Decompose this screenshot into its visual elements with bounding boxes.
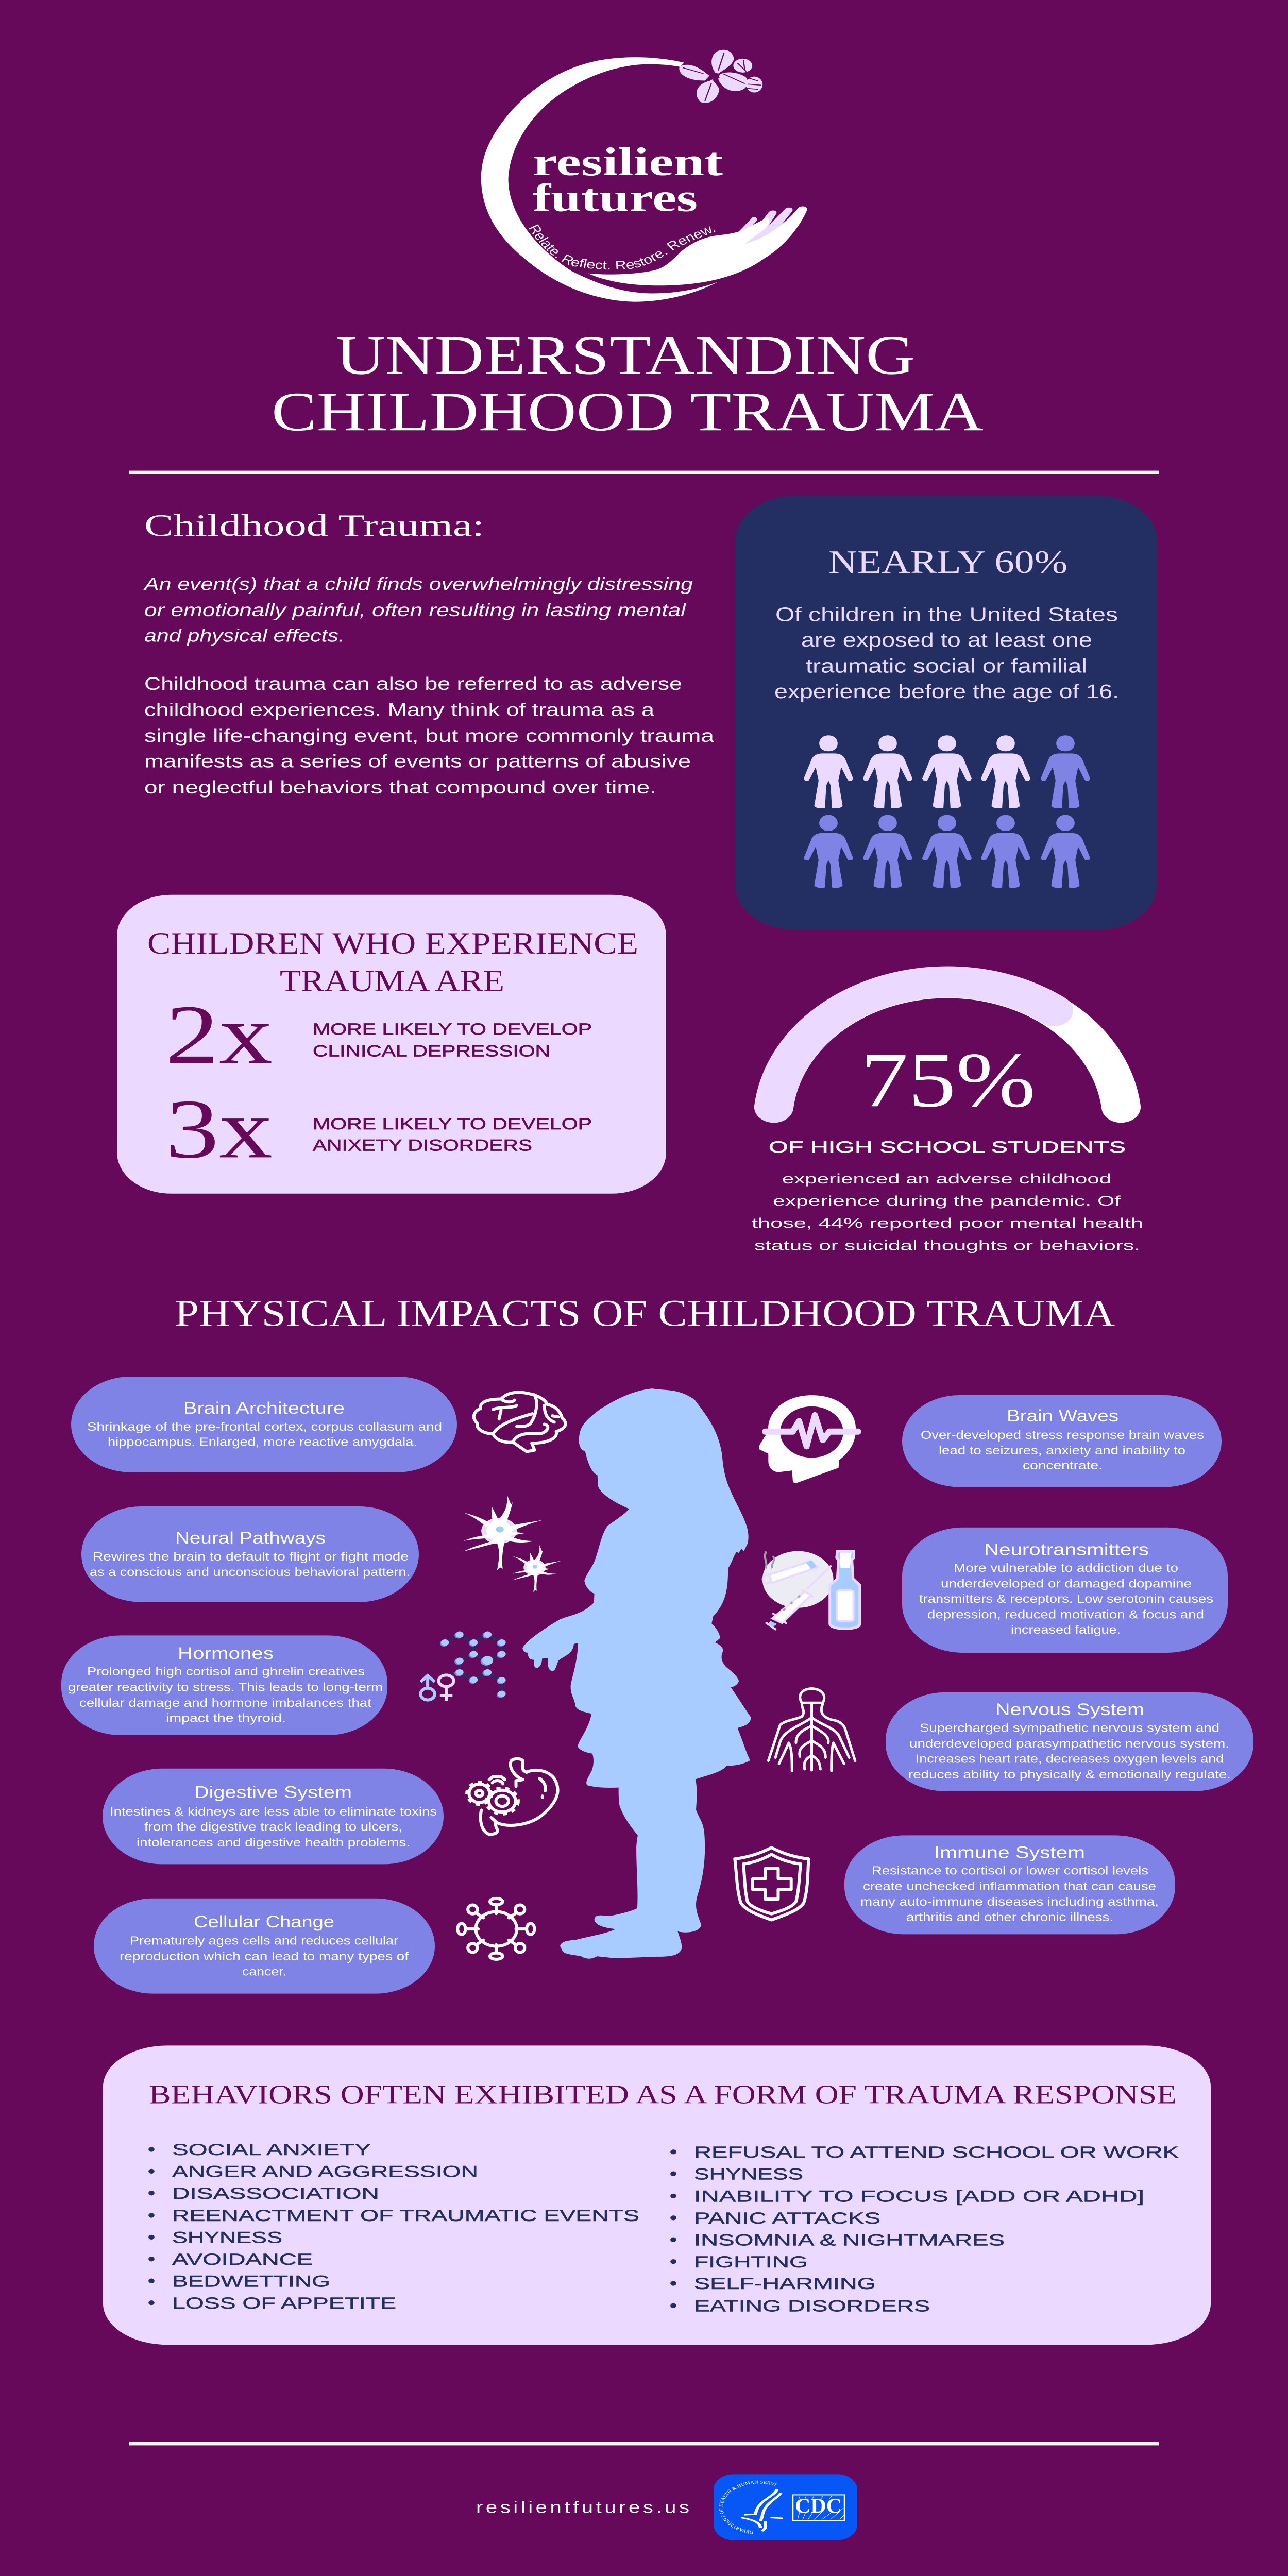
logo wordmark: resilient	[533, 140, 723, 184]
bubble: hormones: greater reactivity to stress. This leads to long-term	[68, 1680, 383, 1694]
list: left column: AVOIDANCE	[172, 2251, 313, 2268]
bubble: hormones: impact the thyroid.	[166, 1711, 286, 1725]
stat: 3x: MORE LIKELY TO DEVELOP	[313, 1115, 592, 1133]
bubble: immune system	[844, 1835, 1175, 1934]
child silhouette	[522, 1388, 751, 1959]
bubble: digestive system: Intestines & kidneys are less able to eliminate toxins	[110, 1805, 437, 1818]
gauge description: experience during the pandemic. Of	[773, 1193, 1121, 1209]
bubble: neural pathways	[81, 1506, 419, 1602]
bubble: brain waves: lead to seizures, anxiety and inability to	[939, 1444, 1185, 1458]
bubble: neurotransmitters: transmitters & receptors. Low serotonin causes	[919, 1592, 1213, 1606]
logo wordmark	[533, 140, 723, 219]
bubble: cellular change: Prematurely ages cells and reduces cellular	[130, 1934, 398, 1947]
panel: 75% of high school students	[752, 982, 1143, 1253]
bubble: neurotransmitters: underdeveloped or damaged dopamine	[941, 1577, 1192, 1590]
body text: single life-changing event, but more commonly trauma	[144, 726, 715, 746]
list: left column	[148, 2141, 639, 2312]
stat: 2x: MORE LIKELY TO DEVELOP	[313, 1021, 592, 1038]
bubble: neural pathways: Neural Pathways	[175, 1528, 326, 1547]
molecule	[440, 1632, 506, 1698]
stat: 2x	[165, 988, 592, 1081]
list: right column: REFUSAL TO ATTEND SCHOOL OR WORK	[694, 2144, 1179, 2161]
bubble: brain architecture: Shrinkage of the pre-frontal cortex, corpus collasum and	[87, 1420, 442, 1433]
list: left column: BEDWETTING	[172, 2273, 330, 2290]
bubble: immune system: many auto-immune diseases including asthma,	[860, 1895, 1159, 1909]
icon: stomach and gears	[467, 1759, 558, 1834]
list: left column: SHYNESS	[172, 2229, 282, 2247]
body text: manifests as a series of events or patterns of abusive	[144, 752, 691, 772]
panel: children who experience trauma	[117, 895, 666, 1194]
bubble: nervous system: reduces ability to physically & emotionally regulate.	[908, 1768, 1231, 1781]
bubble: brain waves	[902, 1395, 1222, 1487]
gauge description	[752, 1171, 1143, 1253]
panel: childhood trauma definition	[143, 508, 715, 798]
logo tagline: Relate. Reflect. Restore. Renew.	[529, 225, 716, 270]
list: right column: INSOMNIA & NIGHTMARES	[694, 2231, 1005, 2249]
bubble: cellular change: cancer.	[242, 1964, 286, 1978]
bubble: brain architecture: Brain Architecture	[183, 1398, 345, 1417]
icon: neurons	[464, 1495, 562, 1592]
stat description	[774, 604, 1119, 703]
list: left column: ANGER AND AGGRESSION	[172, 2163, 478, 2181]
list: right column: INABILITY TO FOCUS [ADD OR ADHD]	[694, 2188, 1144, 2206]
body text: Childhood trauma can also be referred to as adverse	[144, 674, 682, 694]
panel: nearly 60%	[735, 496, 1157, 930]
gauge value: 75%	[860, 1037, 1036, 1124]
bubble: neural pathways: Rewires the brain to default to flight or fight mode	[93, 1550, 409, 1563]
title: CHILDHOOD TRAUMA	[272, 381, 984, 443]
CDC mark: CDC	[795, 2494, 842, 2517]
bubble: immune system: create unchecked inflammation that can cause	[863, 1879, 1156, 1893]
logo wordmark: futures	[533, 176, 698, 219]
stat: 3x: 3x	[165, 1083, 273, 1176]
list: right column: PANIC ATTACKS	[694, 2210, 880, 2227]
bubble: immune system: Resistance to cortisol or lower cortisol levels	[872, 1863, 1148, 1877]
icon: shield with cross	[735, 1848, 808, 1920]
list: right column	[671, 2144, 1179, 2315]
panel heading	[147, 926, 638, 998]
bubble: brain architecture: hippocampus. Enlarged, more reactive amygdala.	[108, 1435, 417, 1449]
body text: childhood experiences. Many think of trauma as a	[144, 700, 655, 720]
gender symbols	[420, 1675, 454, 1701]
gauge description: status or suicidal thoughts or behaviors.	[754, 1238, 1140, 1253]
bubble: neurotransmitters: depression, reduced motivation & focus and	[927, 1607, 1204, 1621]
stat heading: NEARLY 60%	[828, 544, 1067, 580]
list: right column: FIGHTING	[694, 2253, 808, 2271]
list: left column: LOSS OF APPETITE	[172, 2294, 396, 2312]
bubble: nervous system	[886, 1692, 1253, 1791]
bubble: brain architecture	[71, 1377, 457, 1472]
heading: Childhood Trauma:	[144, 508, 484, 543]
definition text: and physical effects.	[144, 626, 345, 646]
bubble: cellular change: Cellular Change	[194, 1912, 334, 1931]
bubble: hormones: cellular damage and hormone imbalances that	[79, 1696, 372, 1709]
definition text: An event(s) that a child finds overwhelmingly distressing	[143, 574, 693, 595]
logo: resilient futures	[481, 49, 807, 302]
definition text: or emotionally painful, often resulting in lasting mental	[144, 600, 686, 620]
bubble: digestive system: from the digestive track leading to ulcers,	[144, 1820, 402, 1834]
stat description: experience before the age of 16.	[774, 681, 1119, 703]
bubble: digestive system: Digestive System	[194, 1783, 352, 1802]
bubble: nervous system: Supercharged sympathetic nervous system and	[920, 1721, 1219, 1735]
HHS seal: DEPARTMENT OF HEALTH & HUMAN SERVICES·USA	[719, 2480, 777, 2534]
bubble: brain waves: Over-developed stress response brain waves	[921, 1428, 1204, 1442]
bubble: immune system: arthritis and other chronic illness.	[906, 1910, 1113, 1924]
gauge chart	[774, 982, 1121, 1107]
list: right column: SHYNESS	[694, 2165, 803, 2183]
icon: brain	[474, 1392, 566, 1452]
bubble: neurotransmitters: More vulnerable to addiction due to	[954, 1561, 1178, 1575]
stat: 3x: ANIXETY DISORDERS	[313, 1137, 532, 1155]
bubble: immune system: Immune System	[934, 1842, 1085, 1861]
stat description: Of children in the United States	[775, 604, 1118, 625]
panel heading: TRAUMA ARE	[280, 963, 504, 998]
icon: nervous system body	[768, 1689, 855, 1771]
bubble: cellular change: reproduction which can lead to many types of	[120, 1950, 409, 1963]
bubble: hormones: Prolonged high cortisol and ghrelin creatives	[87, 1665, 365, 1678]
title: UNDERSTANDING	[336, 325, 915, 386]
panel heading: BEHAVIORS OFTEN EXHIBITED AS A FORM OF TRAUMA RESPONSE	[149, 2079, 1177, 2109]
bubble: nervous system: Nervous System	[995, 1700, 1144, 1719]
body text: or neglectful behaviors that compound over time.	[144, 777, 656, 798]
stat: 3x	[165, 1083, 592, 1176]
pictogram: 6 of 10 people	[804, 735, 1090, 888]
section heading: physical impacts: PHYSICAL IMPACTS OF CHILDHOOD TRAUMA	[175, 1293, 1115, 1334]
panel: behaviors	[103, 2045, 1211, 2345]
icon: head with brain waves	[759, 1395, 858, 1483]
panel heading: CHILDREN WHO EXPERIENCE	[147, 926, 638, 960]
list: left column: SOCIAL ANXIETY	[172, 2141, 371, 2159]
list: left column: REENACTMENT OF TRAUMATIC EVENTS	[172, 2207, 639, 2225]
footer website: resilientfutures.us	[476, 2498, 689, 2517]
gauge description: those, 44% reported poor mental health	[752, 1215, 1143, 1231]
bubble: digestive system	[103, 1769, 444, 1864]
logo crescent and hand	[481, 50, 807, 302]
bubble: neural pathways: as a conscious and unconscious behavioral pattern.	[90, 1565, 410, 1579]
icon: virus cell	[457, 1899, 534, 1959]
bubble: nervous system: underdeveloped parasympathetic nervous system.	[909, 1737, 1229, 1750]
stat description: are exposed to at least one	[801, 630, 1092, 651]
bubble: neurotransmitters: Neurotransmitters	[984, 1539, 1149, 1558]
list: right column: EATING DISORDERS	[694, 2297, 930, 2315]
bubble: hormones	[61, 1635, 387, 1735]
stat: 2x: CLINICAL DEPRESSION	[313, 1042, 550, 1060]
stat: 2x: 2x	[165, 988, 273, 1081]
title	[272, 325, 984, 443]
icon: hormones molecule and gender symbols	[420, 1632, 506, 1701]
bubble: hormones: Hormones	[178, 1643, 274, 1663]
list: left column: DISASSOCIATION	[172, 2185, 379, 2202]
definition text	[143, 574, 693, 646]
bubble: neurotransmitters	[902, 1528, 1228, 1653]
HHS seal	[719, 2480, 783, 2534]
bubble: digestive system: intolerances and digestive health problems.	[137, 1836, 410, 1849]
bubble: cellular change	[94, 1899, 435, 1994]
bubble: nervous system: Increases heart rate, decreases oxygen levels and	[916, 1752, 1224, 1766]
stat description: traumatic social or familial	[806, 655, 1087, 677]
gauge label: OF HIGH SCHOOL STUDENTS	[769, 1138, 1126, 1156]
bubble: brain waves: concentrate.	[1023, 1459, 1103, 1472]
body text	[144, 674, 715, 798]
bubble: brain waves: Brain Waves	[1007, 1406, 1118, 1425]
gauge description: experienced an adverse childhood	[782, 1171, 1111, 1187]
CDC logo badge	[714, 2474, 857, 2540]
bubble: neurotransmitters: increased fatigue.	[1011, 1623, 1121, 1637]
icon: cigarette, syringe and bottle	[762, 1551, 860, 1629]
list: right column: SELF-HARMING	[694, 2275, 876, 2293]
